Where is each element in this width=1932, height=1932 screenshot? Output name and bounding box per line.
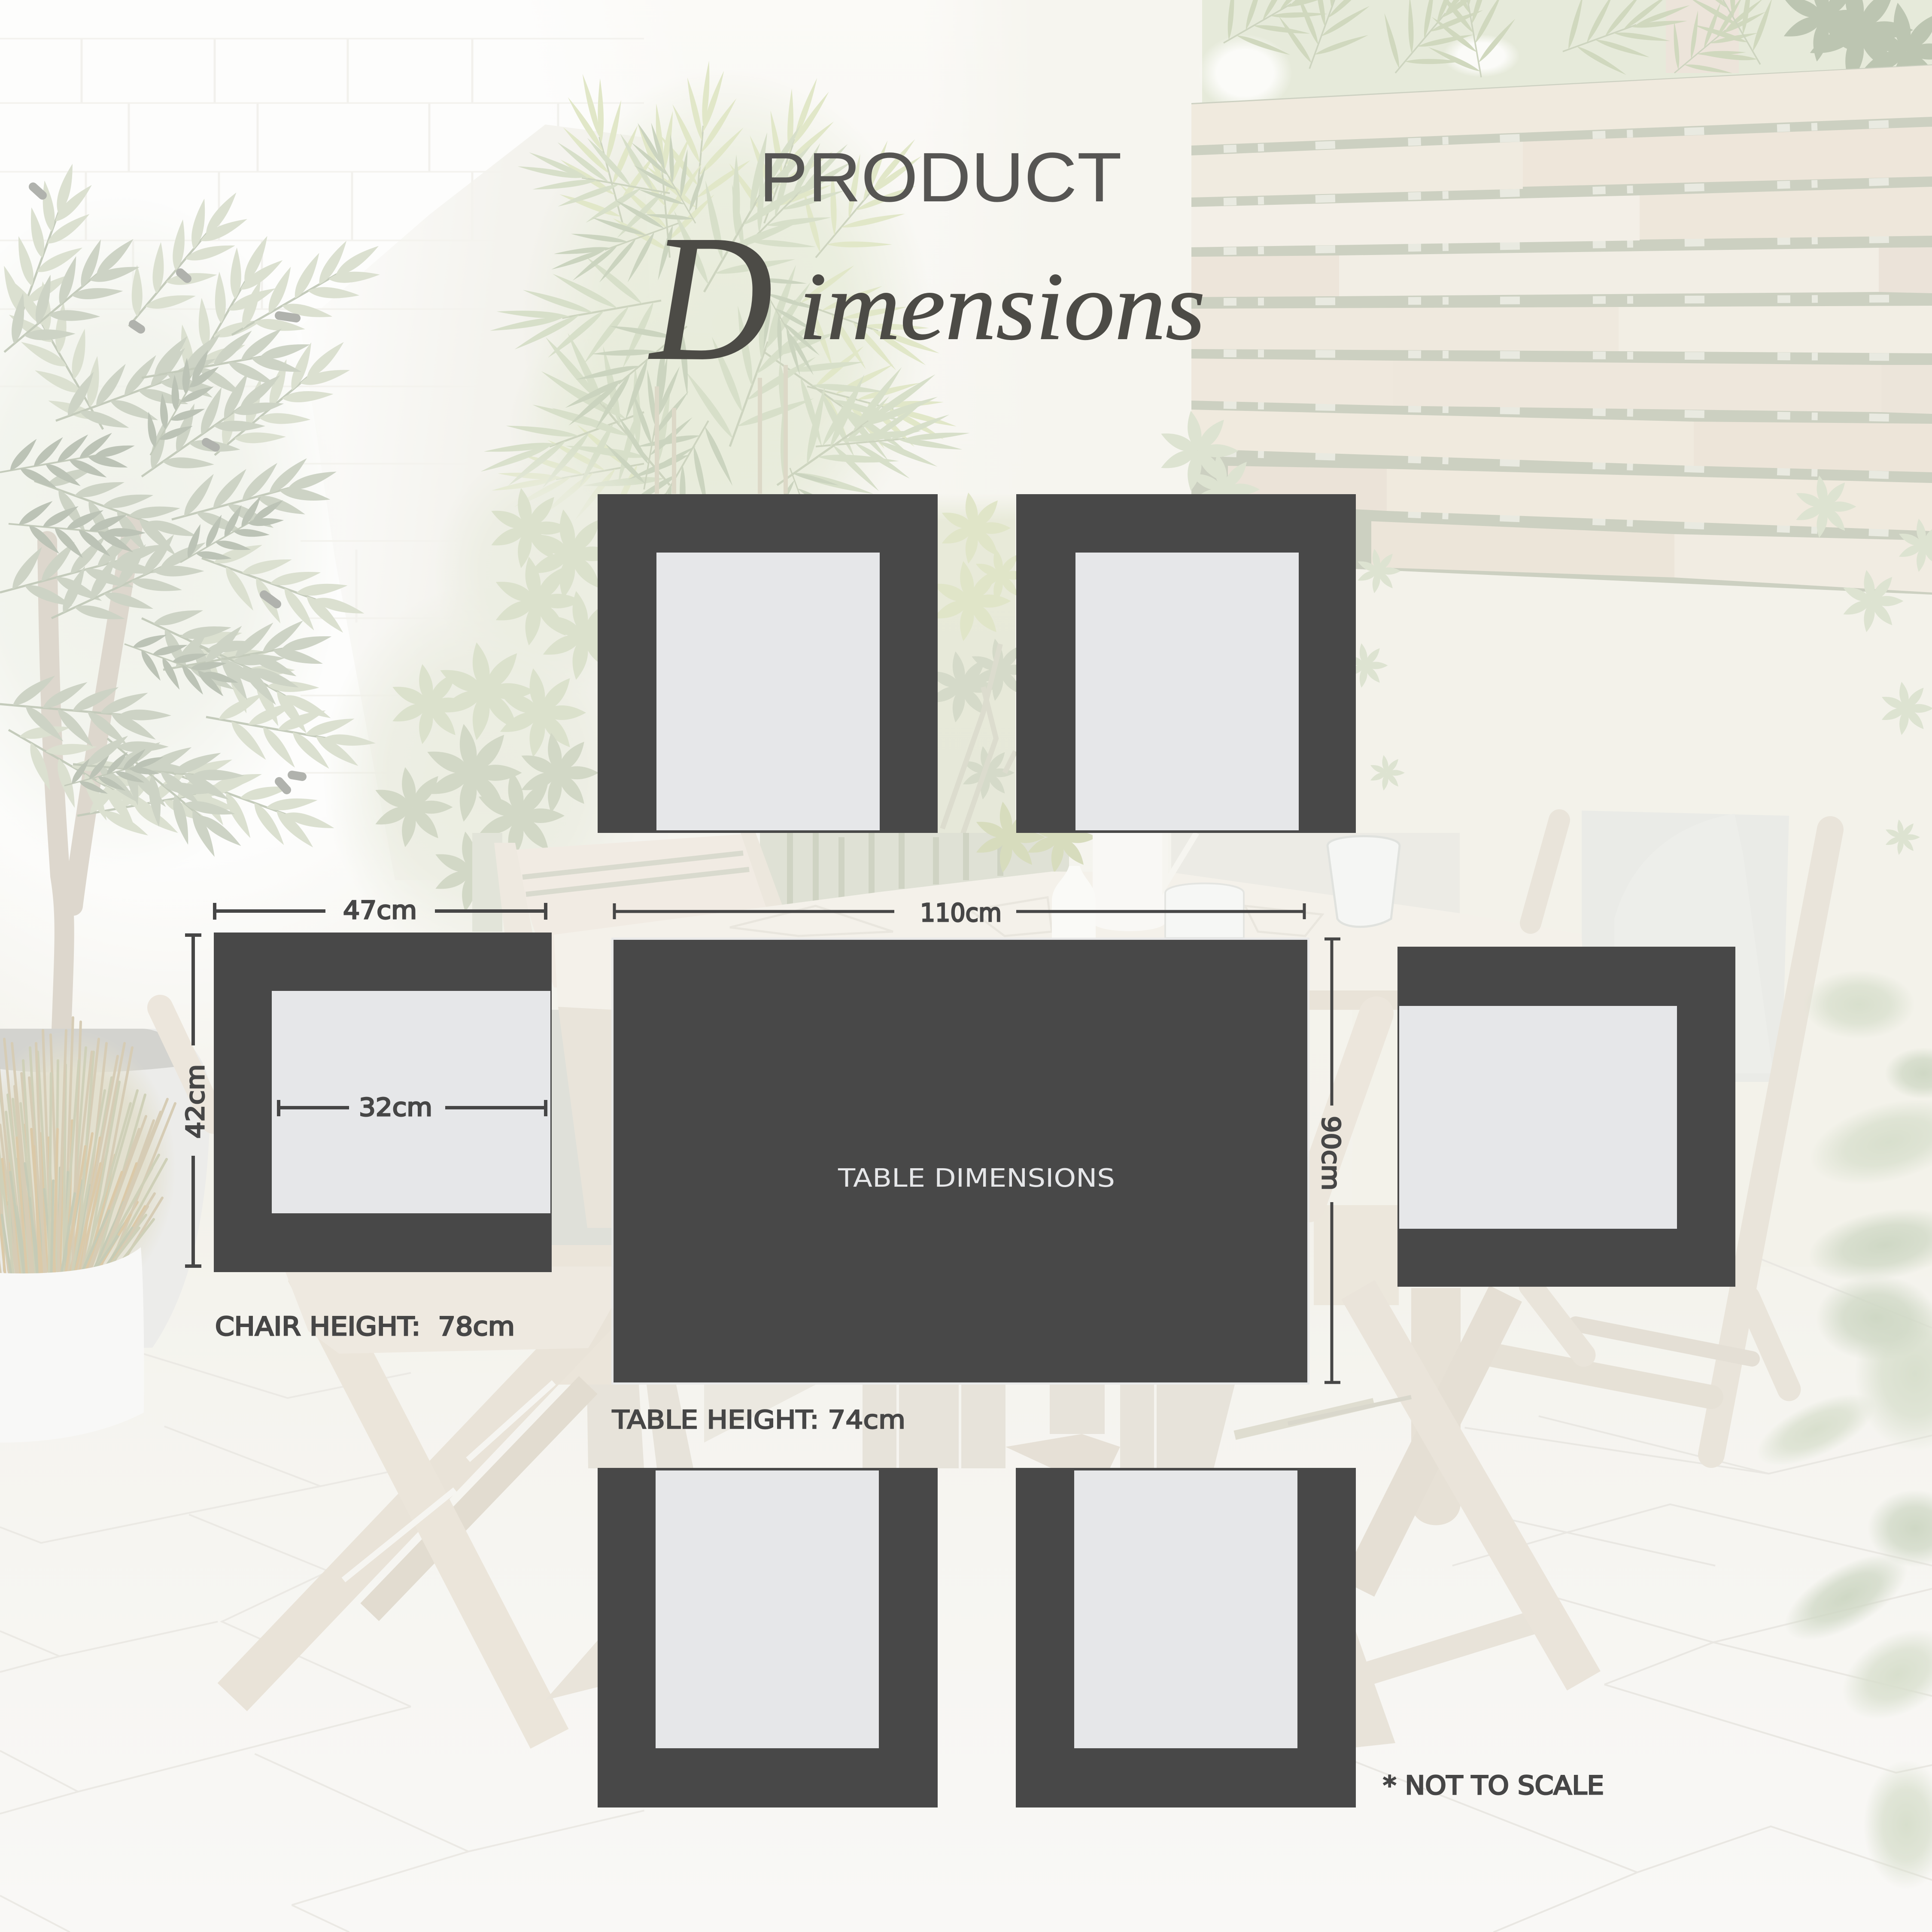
heading: Dimensions script: D [648,198,773,398]
panel: bottom left chair [598,1468,938,1807]
heading: PRODUCT: PRODUCT [759,138,1122,216]
foliage above fence [1198,0,1932,120]
dimension: table depth 90cm [1316,938,1346,1382]
panel: table [611,938,1309,1385]
panel: top left chair [598,494,938,833]
jug [1093,833,1165,931]
table label: TABLE DIMENSIONS [838,1163,1115,1193]
heading: Dimensions script: imensions [799,252,1205,360]
tree trunk [47,524,133,1030]
blurred plant bottom right [1747,970,1932,1889]
note: not to scale: * NOT TO SCALE [1383,1771,1604,1801]
note: table height: TABLE HEIGHT: 74cm [612,1405,905,1434]
dimension: seat width 32cm: 32cm [359,1093,432,1122]
foliage between top chairs [927,492,1032,837]
towel [1582,811,1789,1082]
legs under table [587,1385,1235,1468]
white garden wall right [1352,569,1932,1267]
foliage and wall behind table [472,801,1460,932]
chair posts and bars [1473,820,1830,1455]
panel: left chair [214,933,552,1272]
dimension: chair depth 42cm [181,935,210,1266]
water glass [1327,836,1400,927]
folding chair left [160,1008,644,1739]
note: chair height: CHAIR HEIGHT: 78cm [215,1312,515,1342]
gap left of table [552,1010,613,1245]
bottle [1052,866,1096,938]
dimension: table depth 90cm: 90cm [1316,1116,1346,1191]
bamboo plant behind title [461,56,974,590]
panel: right chair [1397,947,1735,1287]
panel: bottom right chair [1016,1468,1356,1807]
shrub lower left of chairs [322,442,674,962]
title [648,138,1205,398]
pale rendered wall centre [923,0,1202,730]
folding chair right [1473,811,1830,1455]
table side chair and X legs right [1288,1014,1584,1747]
dimension: seat width 32cm [279,1093,546,1122]
dimension: table width 110cm [613,898,1306,927]
back chair top left [494,833,786,987]
leaves in bottle [974,801,1097,874]
white planter [0,1247,144,1443]
dining table and items [552,833,1621,1468]
dimension: chair depth 42cm: 42cm [181,1064,210,1139]
dimension: chair width 47cm [215,896,546,925]
dimension: table width 110cm: 110cm [920,898,1002,927]
dimension: chair width 47cm: 47cm [343,896,417,925]
wooden slatted fence [1191,64,1932,601]
climbing vines near fence [1158,410,1932,856]
plant pot and planter with grass [0,1018,210,1443]
floor tiles [0,1259,1932,1932]
sunlit brick wall [0,0,708,1116]
second glass [1165,884,1244,938]
ornamental grass [0,1018,175,1284]
olive tree left [0,152,400,1030]
grey stone pot [0,1029,210,1350]
panel: top right chair [1016,494,1356,833]
wall shadow from foliage [301,125,670,880]
